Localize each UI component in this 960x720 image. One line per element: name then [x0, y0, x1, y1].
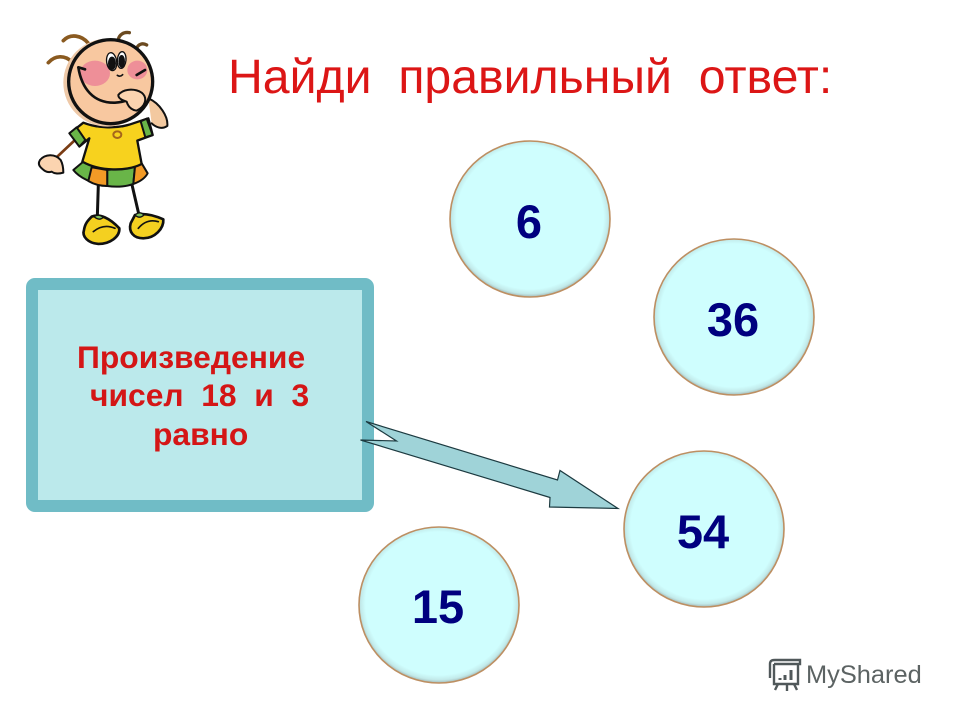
left arm and hand	[57, 140, 75, 157]
arrow	[360, 422, 618, 508]
question text: чисел 18 и 3	[90, 377, 309, 413]
smile	[78, 67, 145, 103]
right arm	[148, 98, 167, 128]
icon: thinking cartoon child	[39, 32, 167, 244]
panel: question box	[32, 284, 368, 506]
title: Найди правильный ответ:	[228, 50, 832, 104]
hand at mouth	[118, 90, 145, 111]
icon: presentation board	[770, 660, 800, 691]
head	[69, 40, 153, 124]
head shadow	[63, 39, 151, 127]
question text	[77, 339, 309, 452]
answer: 36	[654, 239, 814, 395]
answer: 54: 54	[677, 505, 729, 558]
answer: 36: 36	[707, 293, 759, 346]
shoes	[84, 213, 163, 244]
cheeks	[80, 61, 147, 86]
hair strands	[48, 32, 147, 63]
watermark: MyShared: MyShared	[806, 661, 922, 689]
answer: 6	[450, 141, 610, 297]
legs	[97, 183, 139, 217]
answer: 6: 6	[516, 195, 542, 248]
skirt	[73, 162, 148, 187]
answer: 54	[624, 451, 784, 607]
question text: Произведение	[77, 339, 305, 375]
eyes	[105, 51, 127, 71]
answer: 15: 15	[412, 580, 464, 633]
answer: 15	[359, 527, 519, 683]
watermark: MyShared	[770, 660, 922, 691]
shirt	[70, 118, 153, 169]
question text: равно	[153, 416, 248, 452]
